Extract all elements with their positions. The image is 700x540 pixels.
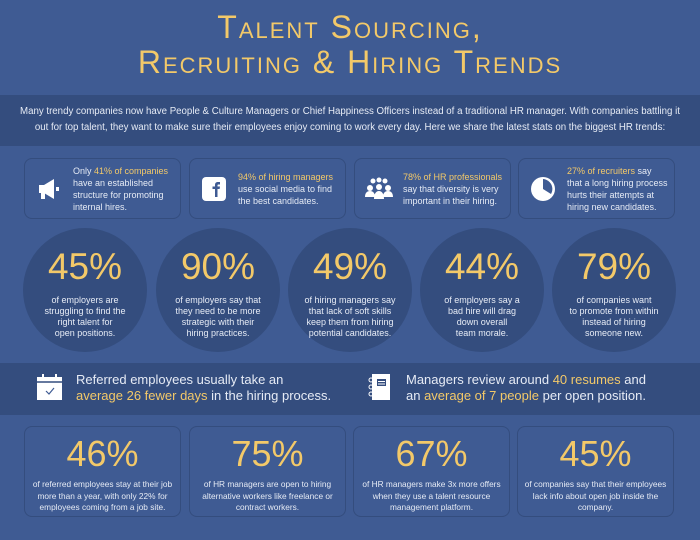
card: social media: 94% of hiring managers use social media to find the best candidates.: [238, 172, 333, 206]
icon: people: [365, 178, 393, 199]
card: 45%: of companies say that their employees lack info about open job inside the company.: [525, 479, 666, 512]
circle: 49%: of hiring managers say: [304, 295, 396, 305]
icon: calendar: [37, 374, 62, 400]
circle: 49%: 49%: [313, 246, 387, 287]
card: social media: [189, 158, 346, 219]
circle: 45%: [23, 228, 147, 352]
text: managers review: an average of 7 people per open position.: [406, 388, 646, 403]
circle: 79%: [552, 228, 676, 352]
circle: 44%: bad hire will drag: [448, 306, 516, 316]
icon: megaphone: [39, 179, 59, 199]
card: 46%: [24, 426, 181, 517]
circle: 49%: keep them from hiring: [306, 317, 394, 327]
text: referred employees: average 26 fewer days in the hiring process.: [76, 388, 331, 403]
card: internal hires: Only 41% of companies have an established structure for promoting internal hires.: [73, 166, 168, 212]
circle: 44%: down overall: [457, 317, 507, 327]
circle: 49%: [288, 228, 412, 352]
circle: 44%: team morale.: [456, 328, 508, 338]
circle: 45%: of employers are: [51, 295, 119, 305]
circle: 90%: 90%: [181, 246, 255, 287]
card: 45%: 45%: [559, 433, 632, 474]
card: internal hires: [24, 158, 181, 219]
circle: 49%: that lack of soft skills: [309, 306, 391, 316]
title: Talent Sourcing,: [217, 9, 483, 45]
text: referred employees: Referred employees usually take an: [76, 372, 283, 387]
circle: 90%: [156, 228, 280, 352]
intro band: Many trendy companies now have People & Culture Managers or Chief Happiness Officers instead of a traditional HR manager. With companies battling it out for top talent, they want to make sure their employees enjoy coming to work every day. Here we share the latest stats on the biggest HR trends:: [20, 106, 680, 133]
card: 46%: 46%: [66, 433, 139, 474]
circle: 79%: instead of hiring: [582, 317, 646, 327]
circle: 44%: [420, 228, 544, 352]
card: 67%: 67%: [395, 433, 468, 474]
icon: notebook: [368, 374, 390, 400]
circle: 90%: they need to be more: [175, 306, 261, 316]
intro band: [0, 95, 700, 146]
icon: pie clock: [531, 177, 555, 201]
circle: 44%: 44%: [445, 246, 519, 287]
text: managers review: Managers review around 40 resumes and: [406, 372, 646, 387]
card: 75%: [189, 426, 346, 517]
icon: facebook: [202, 177, 226, 201]
circle: 49%: potential candidates.: [309, 328, 391, 338]
circle: 90%: hiring practices.: [186, 328, 250, 338]
circle: 45%: 45%: [48, 246, 122, 287]
title: Recruiting & Hiring Trends: [138, 44, 562, 80]
card: 45%: [517, 426, 674, 517]
card: long hiring process: 27% of recruiters say that a long hiring process hurts their attempts at hiring new candidates.: [567, 166, 668, 212]
title: [138, 9, 562, 80]
text: managers review: [406, 372, 646, 403]
card: 75%: of HR managers are open to hiring alternative workers like freelance or contract workers.: [202, 479, 333, 512]
circle: 44%: of employers say a: [444, 295, 520, 305]
circle: 79%: of companies want: [576, 295, 652, 305]
circle: 45%: open positions.: [55, 328, 115, 338]
circle: 45%: right talent for: [57, 317, 113, 327]
text: referred employees: [76, 372, 331, 403]
card: 67%: of HR managers make 3x more offers when they use a talent resource management platform.: [362, 479, 501, 512]
card: 46%: of referred employees stay at their job more than a year, with only 22% for employees coming from a job site.: [33, 479, 172, 512]
circle: 79%: someone new.: [585, 328, 643, 338]
card: 75%: 75%: [231, 433, 304, 474]
circle: 90%: strategic with their: [182, 317, 254, 327]
circle: 79%: 79%: [577, 246, 651, 287]
circle: 45%: struggling to find the: [44, 306, 126, 316]
card: diversity: [354, 158, 511, 219]
card: 67%: [353, 426, 510, 517]
middle band: [0, 363, 700, 415]
card: diversity: 78% of HR professionals say that diversity is very important in their hiring.: [403, 172, 502, 206]
card: long hiring process: [518, 158, 675, 219]
circle: 79%: to promote from within: [569, 306, 659, 316]
circle: 90%: of employers say that: [175, 295, 261, 305]
